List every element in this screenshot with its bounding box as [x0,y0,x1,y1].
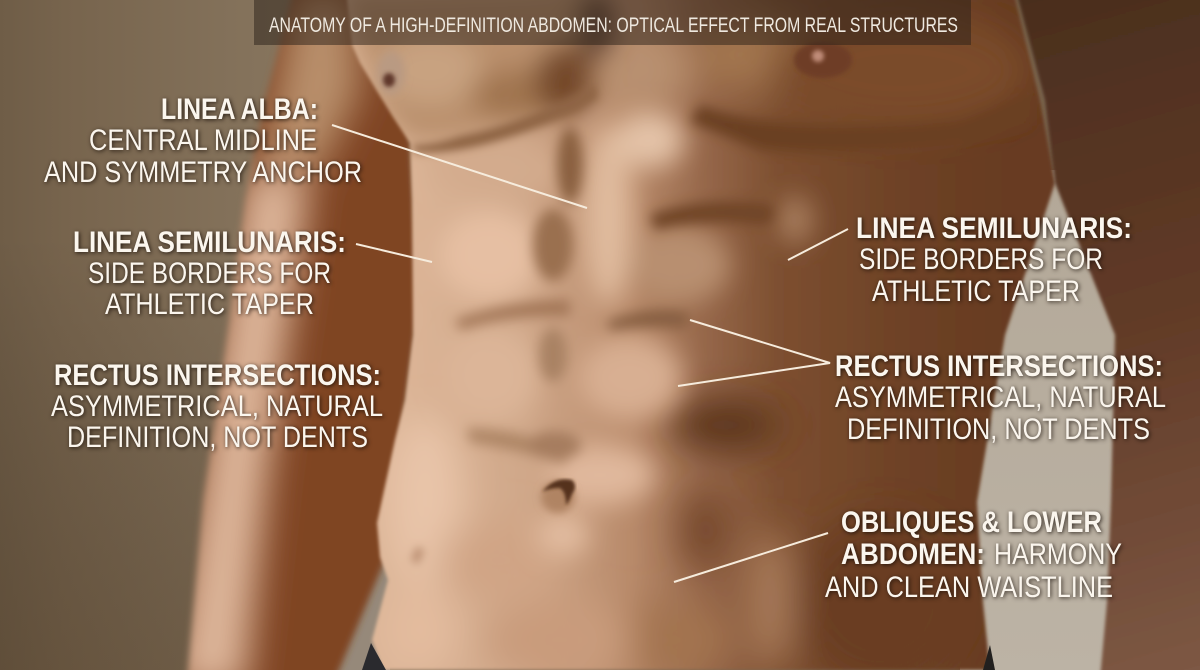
leader line: linea alba [332,125,587,208]
label: linea semilunaris left: LINEA SEMILUNARIS: [73,226,346,259]
label: linea semilunaris right [856,212,1132,308]
photo: left arm [184,0,414,670]
label: obliques and lower abdomen: ABDOMEN: [841,538,985,571]
photo: torso [340,0,1060,670]
label: obliques and lower abdomen: AND CLEAN WAISTLINE [825,571,1113,604]
label: linea semilunaris right: ATHLETIC TAPER [872,275,1080,308]
label: obliques and lower abdomen: OBLIQUES & LOWER [841,506,1102,539]
label: linea semilunaris left: SIDE BORDERS FOR [88,257,331,290]
label: rectus intersections left: DEFINITION, NOT DENTS [67,421,368,454]
pectoral underside [412,84,598,152]
photo: right arm [1013,0,1200,670]
upper right shadow [686,102,930,154]
leader line: linea semilunaris right [788,229,848,260]
label: linea semilunaris left [73,226,346,321]
leader lines: rectus intersections [678,320,830,386]
leader line: obliques [674,533,828,582]
title bar: ANATOMY OF A HIGH-DEFINITION ABDOMEN: OPTICAL EFFECT FROM REAL STRUCTURES [269,13,958,37]
label: rectus intersections right [835,350,1166,446]
label: linea alba [44,93,362,189]
label: obliques and lower abdomen [825,506,1122,604]
label: linea alba: LINEA ALBA: [161,93,318,126]
label: linea semilunaris left: ATHLETIC TAPER [105,288,314,321]
label: rectus intersections left: ASYMMETRICAL, NATURAL [51,390,383,423]
label: rectus intersections left: RECTUS INTERSECTIONS: [54,359,381,392]
label: linea semilunaris right: LINEA SEMILUNARIS: [856,212,1132,245]
label: linea alba: AND SYMMETRY ANCHOR [44,156,362,189]
light muscle blocks [430,148,570,192]
icon: right nipple [794,42,852,78]
waistband left [362,643,386,670]
title bar [254,0,971,45]
chest and pectoral [348,0,561,147]
label: obliques and lower abdomen: HARMONY [994,538,1122,571]
waistband right [983,645,995,670]
ab grooves [557,127,583,203]
label: linea alba: CENTRAL MIDLINE [89,124,317,157]
leader line: linea semilunaris left [356,244,432,262]
icon: left nipple [377,51,405,95]
label: rectus intersections left [51,359,383,454]
label: rectus intersections right: DEFINITION, NOT DENTS [847,413,1150,446]
label: linea semilunaris right: SIDE BORDERS FOR [859,243,1103,276]
icon: navel [541,479,575,513]
